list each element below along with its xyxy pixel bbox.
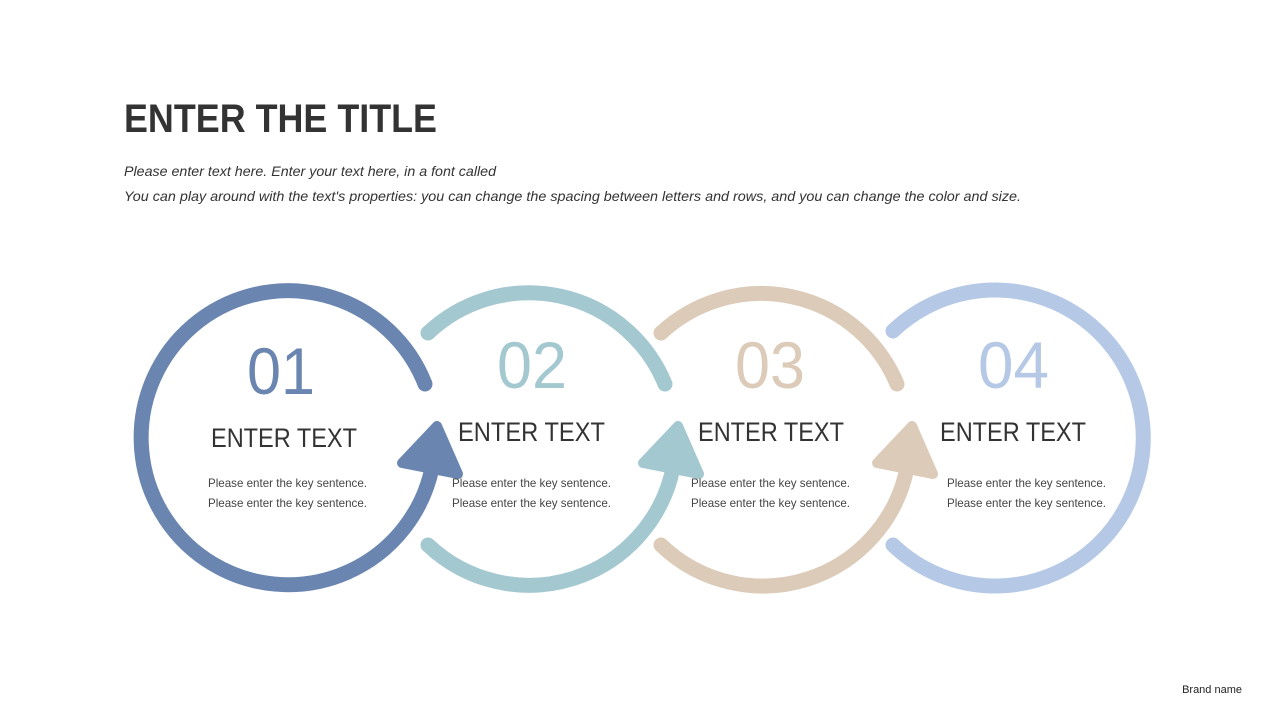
arrowhead 3	[877, 426, 933, 474]
step 4	[893, 290, 1143, 586]
heading 2: ENTER TEXT	[458, 417, 605, 447]
step 3	[661, 293, 933, 586]
subtitle text: Please enter text here. Enter your text here, in a font called	[124, 163, 497, 179]
title: ENTER THE TITLE	[124, 97, 437, 141]
number 03: 03	[735, 328, 805, 402]
brand name: Brand name	[1182, 684, 1242, 696]
number 01: 01	[247, 334, 315, 408]
heading 4: ENTER TEXT	[940, 417, 1086, 447]
subtitle text: You can play around with the text's properties: you can change the spacing between letters and rows, and you can change the color and size.	[124, 188, 1021, 204]
sentences 2: Please enter the key sentence.	[452, 496, 611, 510]
arcs 3	[661, 293, 897, 384]
sentences 3	[691, 476, 850, 510]
sentences 3: Please enter the key sentence.	[691, 476, 850, 490]
heading 1: ENTER TEXT	[211, 423, 357, 453]
sentences 1: Please enter the key sentence.	[208, 476, 367, 490]
sentences 1: Please enter the key sentence.	[208, 496, 367, 510]
sentences 4: Please enter the key sentence.	[947, 476, 1106, 490]
sentences 3: Please enter the key sentence.	[691, 496, 850, 510]
sentences 2	[452, 476, 611, 510]
arc 4	[893, 290, 1143, 586]
number 04: 04	[978, 328, 1049, 402]
arcs 2	[428, 293, 665, 384]
sentences 4: Please enter the key sentence.	[947, 496, 1106, 510]
step 2	[428, 293, 699, 585]
sentences 2: Please enter the key sentence.	[452, 476, 611, 490]
arc 1	[141, 291, 432, 585]
heading 3: ENTER TEXT	[698, 417, 844, 447]
arrowhead 2	[643, 426, 699, 474]
subtitle text	[124, 163, 1021, 204]
sentences 4	[947, 476, 1106, 510]
arrowhead 1	[402, 426, 458, 474]
sentences 1	[208, 476, 367, 510]
number 02: 02	[497, 328, 567, 402]
step 1	[141, 291, 458, 585]
